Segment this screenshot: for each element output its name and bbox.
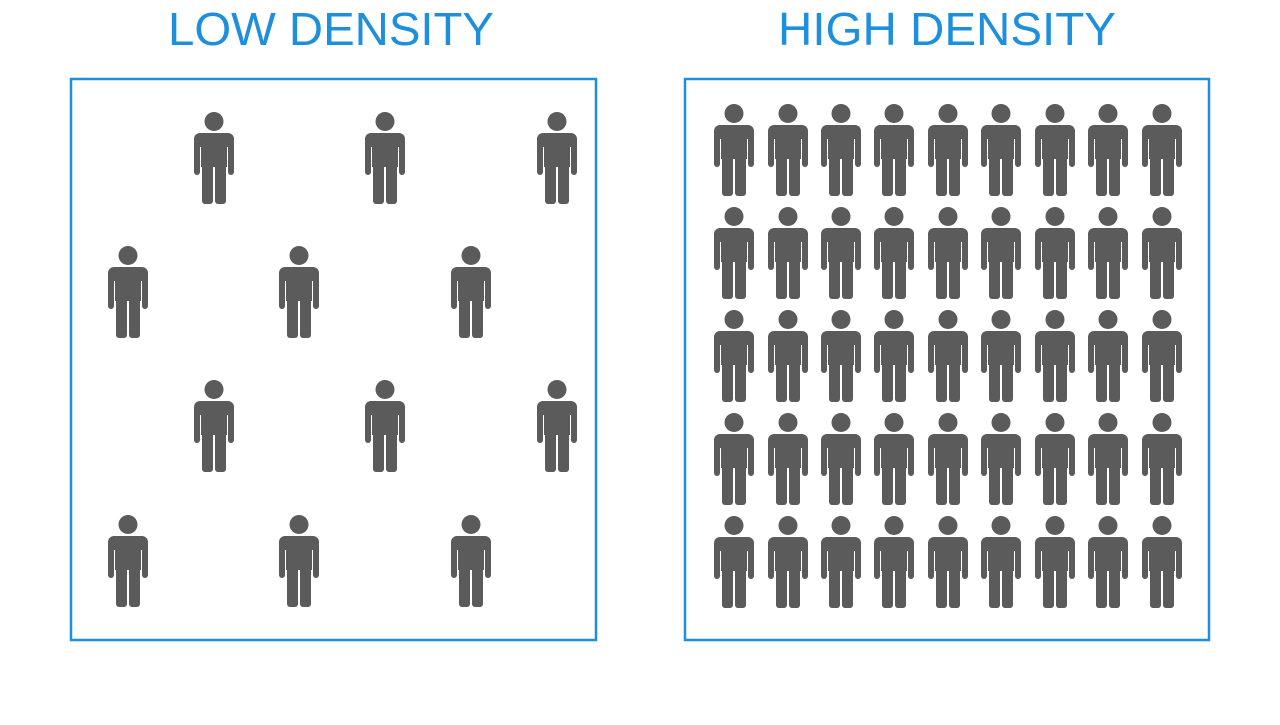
title: low density: LOW DENSITY [168, 3, 494, 55]
title: high density: HIGH DENSITY [778, 3, 1116, 55]
panel: low density [71, 79, 596, 640]
panel: high density [685, 79, 1209, 640]
